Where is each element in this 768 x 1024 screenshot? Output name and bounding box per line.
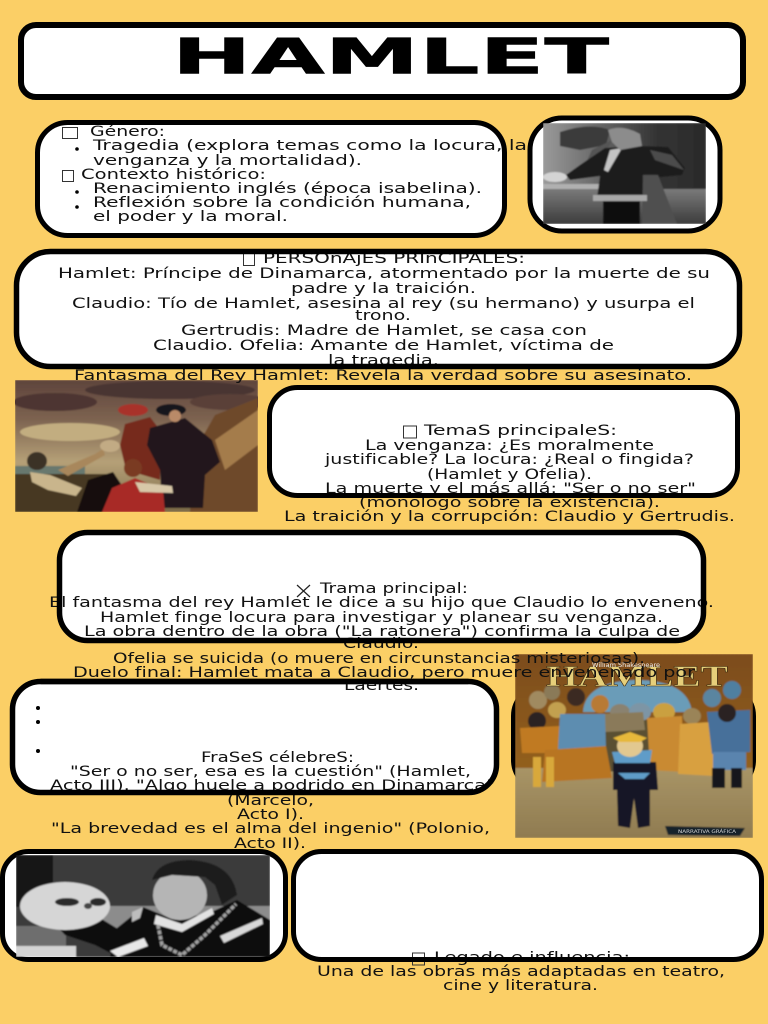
panel: photo frame (2, 852, 286, 960)
cover banner label: NARRATIVA GRÁFICA (678, 828, 737, 835)
text: gertrudis: Gertrudis: Madre de Hamlet, se casa con (181, 323, 587, 339)
text: cine y literatura: cine y literatura. (443, 978, 598, 994)
panel: image frame with actor (530, 118, 720, 231)
text: brevedad: "La brevedad es el alma del ingenio" (Polonio, (51, 821, 490, 837)
checkbox icon (62, 170, 74, 182)
text: tragedia: Tragedia (explora temas como la locura, la (92, 138, 527, 154)
text: acto ii: Acto II). (234, 836, 306, 852)
text: trono: trono. (355, 308, 411, 324)
image: comic book cover (515, 654, 753, 838)
panel: frame behind comic cover (514, 686, 754, 790)
image: actor holding a skull (543, 123, 706, 224)
panel border (38, 122, 504, 236)
text: ofelia: Ofelia se suicida (o muere en circunstancias misteriosas). (113, 651, 645, 667)
panel: legado e influencia (294, 852, 762, 994)
text: finge locura: Hamlet finge locura para investigar y planear su venganza. (100, 610, 663, 626)
text: duelo final: Duelo final: Hamlet mata a Claudio, pero muere envenenado por (73, 665, 695, 681)
bullet (36, 706, 40, 710)
text: traicion: La traición y la corrupción: Claudio y Gertrudis. (284, 509, 735, 525)
text: hamlet: Hamlet: Príncipe de Dinamarca, atormentado por la muerte de su (58, 266, 710, 282)
bullet (36, 749, 40, 753)
title panel (21, 25, 743, 97)
bullet (75, 205, 79, 209)
title: HAMLET (172, 28, 610, 86)
panel border (60, 532, 704, 640)
bullet (75, 147, 79, 151)
panel: genero y contexto (38, 122, 527, 236)
text: fantasma: El fantasma del rey Hamlet le dice a su hijo que Claudio lo envenenó. (49, 595, 714, 611)
bullet (36, 720, 40, 724)
heading: PERSOnAjES PRInCIPALES: (263, 251, 525, 267)
panel: frases celebres (12, 682, 496, 852)
panel: personajes principales (16, 251, 740, 384)
text: marcelo: (Marcelo, (227, 793, 314, 809)
text: fantasma: Fantasma del Rey Hamlet: Revela la verdad sobre su asesinato. (74, 368, 692, 384)
panel border (270, 388, 738, 496)
panel: temas principales (270, 388, 738, 525)
icon: crossed swords (297, 585, 310, 597)
panel border (16, 252, 740, 366)
text: hamlet y ofelia: (Hamlet y Ofelia). (427, 467, 592, 483)
text: algo huele: Acto III). "Algo huele a podrido en Dinamarca" (50, 778, 495, 794)
cover title: HAMLET (546, 660, 728, 693)
bullet (75, 190, 79, 194)
text: venganza: venganza y la mortalidad). (93, 153, 362, 169)
cover author: William Shakespeare (592, 662, 660, 669)
label: genero: Género: (90, 124, 165, 140)
text: laertes: Laertes. (344, 678, 419, 694)
panel border (294, 852, 762, 960)
text: venganza: La venganza: ¿Es moralmente (365, 438, 654, 454)
text: renacimiento: Renacimiento inglés (época isabelina). (93, 181, 482, 197)
text: ofelia: Claudio. Ofelia: Amante de Hamlet, víctima de (153, 338, 614, 354)
heading: FraSeS célebreS: (201, 750, 354, 766)
text: adaptadas: Una de las obras más adaptadas en teatro, (317, 964, 725, 980)
label: contexto: Contexto histórico: (81, 167, 266, 183)
text: la tragedia: la tragedia. (328, 353, 439, 369)
text: padre: padre y la traición. (291, 281, 476, 297)
text: claudio: Claudio. (343, 636, 419, 652)
text: la ratonera: La obra dentro de la obra ("La ratonera") confirma la culpa de (84, 624, 680, 640)
text: la muerte: La muerte y el más allá: "Ser o no ser" (325, 481, 696, 497)
text: claudio: Claudio: Tío de Hamlet, asesina al rey (su hermano) y usurpa el (72, 296, 695, 312)
text: ser o no ser: "Ser o no ser, esa es la cuestión" (Hamlet, (70, 764, 471, 780)
text: el poder: el poder y la moral. (93, 209, 288, 225)
image: painting of Hamlet and Horatio (13, 380, 270, 512)
panel: trama principal (49, 532, 714, 694)
heading: Legado e influencia: (434, 950, 630, 966)
checkbox icon (404, 426, 416, 438)
text: monologo: (monólogo sobre la existencia). (359, 495, 660, 511)
text: locura: justificable? La locura: ¿Real o fingida? (324, 452, 694, 468)
text: acto i: Acto I). (237, 807, 304, 823)
heading: TemaS principaleS: (423, 423, 617, 439)
checkbox icon (62, 128, 78, 138)
panel border (12, 682, 496, 792)
heading: Trama principal: (319, 581, 468, 597)
image: actor with skull (16, 855, 270, 957)
text: reflexion: Reflexión sobre la condición humana, (93, 195, 471, 211)
checkbox icon (412, 953, 424, 965)
checkbox icon (244, 254, 254, 266)
